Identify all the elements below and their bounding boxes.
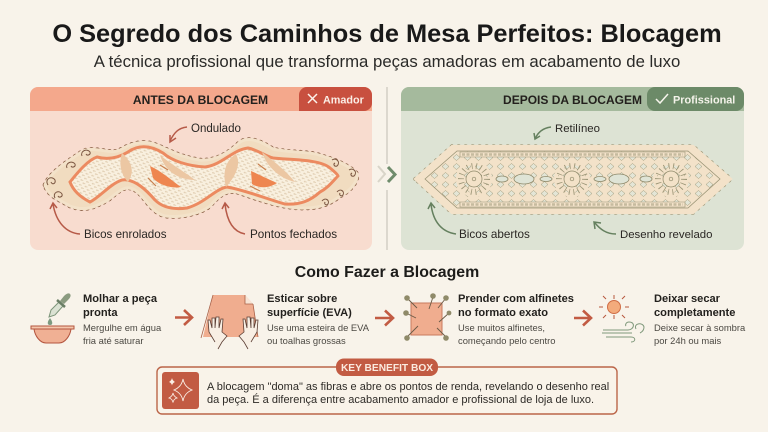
- arrow and label: ondulado: Ondulado: [191, 123, 241, 135]
- panel: antes da blocagem: [30, 87, 372, 250]
- arrow: step 1 to 2: [175, 310, 192, 325]
- step 4 text: Deixar secar: [654, 293, 720, 305]
- section heading: Como Fazer a Blocagem: [295, 264, 479, 281]
- icon: pinned square: [403, 293, 451, 341]
- step 4 text: [654, 293, 746, 346]
- divider with chevrons: [378, 87, 395, 250]
- step 2 text: Use uma esteira de EVA: [267, 322, 369, 333]
- badge: profissional: Profissional: [673, 94, 735, 106]
- benefit text: [207, 380, 609, 406]
- step 2 text: superfície (EVA): [267, 307, 352, 319]
- arrow and label: pontos fechados: Pontos fechados: [250, 228, 337, 241]
- panel heading: depois: DEPOIS DA BLOCAGEM: [503, 93, 642, 107]
- step 1 text: pronta: [83, 307, 118, 319]
- illustration: wavy runner: [45, 140, 357, 217]
- step 1 text: Mergulhe em água: [83, 322, 161, 333]
- step 1 text: Molhar a peça: [83, 293, 157, 305]
- step 3 text: Prender com alfinetes: [458, 293, 574, 305]
- step 4 text: completamente: [654, 307, 735, 319]
- arrow: step 2 to 3: [375, 310, 393, 326]
- arrow and label: bicos enrolados: Bicos enrolados: [84, 228, 167, 241]
- icon: dropper and bowl: [31, 293, 74, 343]
- tag: key benefit box: KEY BENEFIT BOX: [341, 363, 433, 374]
- arrow and label: ondulado: [170, 123, 241, 142]
- step 4 text: Deixe secar à sombra: [654, 322, 745, 333]
- step 3 text: [458, 293, 574, 346]
- step 1 text: fria até saturar: [83, 334, 143, 346]
- arrow and label: bicos enrolados: [50, 203, 167, 241]
- illustration: blocked lace runner: [415, 146, 731, 213]
- badge: amador: Amador: [323, 94, 365, 106]
- benefit text: da peça. É a diferença entre acabamento amador e profissional de loja de luxo.: [207, 394, 594, 406]
- badge: profissional: [647, 87, 744, 111]
- step 4 text: por 24h ou mais: [654, 334, 721, 346]
- arrow: step 3 to 4: [574, 310, 591, 326]
- step 1 text: [83, 293, 162, 346]
- subtitle: A técnica profissional que transforma peças amadoras em acabamento de luxo: [94, 52, 680, 71]
- arrow and label: retilíneo: [534, 123, 600, 139]
- title: O Segredo dos Caminhos de Mesa Perfeitos: Blocagem: [52, 20, 722, 48]
- step 2 text: ou toalhas grossas: [267, 334, 346, 346]
- arrow and label: bicos abertos: [428, 203, 530, 241]
- badge: amador: [299, 87, 372, 111]
- panel heading: antes: ANTES DA BLOCAGEM: [133, 93, 268, 107]
- tag: key benefit box: [336, 358, 438, 376]
- step 3 text: Use muitos alfinetes,: [458, 322, 545, 333]
- arrow and label: desenho revelado: Desenho revelado: [620, 229, 712, 241]
- arrow and label: retilíneo: Retilíneo: [555, 123, 600, 135]
- step 3 text: no formato exato: [458, 307, 548, 319]
- step 3 text: começando pelo centro: [458, 334, 555, 346]
- step 2 text: Esticar sobre: [267, 293, 337, 305]
- key benefit box: [157, 358, 617, 414]
- panel: depois da blocagem: [401, 87, 744, 250]
- arrow and label: desenho revelado: [594, 222, 712, 241]
- arrow and label: pontos fechados: [222, 203, 337, 241]
- icon: sparkles: [162, 372, 199, 409]
- step 2 text: [267, 293, 369, 346]
- icon: hands stretching fabric: [201, 295, 258, 349]
- icon: sun and wind: [599, 295, 644, 342]
- arrow and label: bicos abertos: Bicos abertos: [459, 228, 530, 241]
- benefit text: A blocagem "doma" as fibras e abre os pontos de renda, revelando o desenho real: [207, 380, 609, 392]
